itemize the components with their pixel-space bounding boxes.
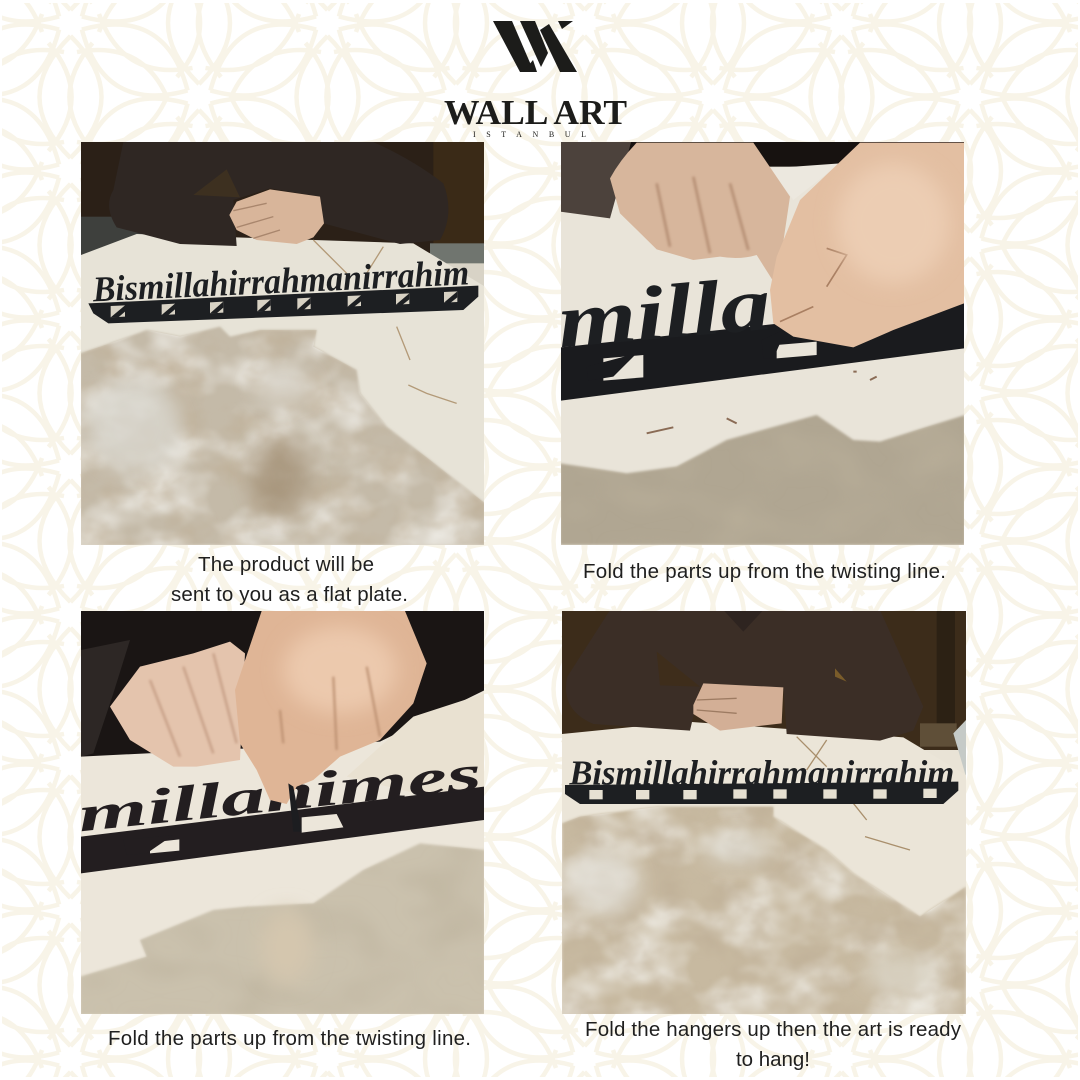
logo xyxy=(444,21,627,139)
right hand xyxy=(235,611,427,804)
plaque lettering: millahimes xyxy=(75,744,484,842)
caption: step 2: Fold the parts up from the twisting line. xyxy=(583,560,946,583)
panel: step 4 photo xyxy=(562,611,966,1014)
left hand xyxy=(610,143,790,287)
logo subtitle: ISTANBUL xyxy=(473,130,586,139)
caption: step 4 xyxy=(585,1018,962,1071)
caption: step 1: sent to you as a flat plate. xyxy=(171,583,408,606)
sweater xyxy=(566,610,923,741)
hands xyxy=(229,189,324,244)
plaque lettering: Bismillahirrahmanirrahim xyxy=(568,754,954,792)
icon: WM monogram xyxy=(493,21,577,72)
tool xyxy=(288,783,302,832)
panel: step 2 photo xyxy=(554,142,964,545)
sweater xyxy=(109,142,448,246)
panel: step 3 photo xyxy=(75,611,484,1014)
plaque lettering: milla xyxy=(554,260,774,364)
metal plaque finished xyxy=(565,754,958,804)
marble lower area xyxy=(560,415,965,545)
hanger tabs xyxy=(111,291,457,317)
caption: step 1: The product will be xyxy=(198,553,374,576)
table top xyxy=(81,234,485,545)
left hand xyxy=(110,642,245,767)
caption: step 4: to hang! xyxy=(736,1048,810,1071)
caption: step 1 xyxy=(171,553,408,606)
panel: step 1 photo xyxy=(81,142,484,545)
marble lower area xyxy=(562,807,966,1015)
plaque lettering: Bismillahirrahmanirrahim xyxy=(91,252,470,309)
metal plaque folding xyxy=(75,744,484,873)
metal plaque folding xyxy=(554,260,964,401)
logo wordmark: WALL ART xyxy=(444,93,627,132)
marble lower area xyxy=(80,843,485,1015)
metal plaque flat xyxy=(88,252,478,323)
right hand xyxy=(770,143,964,347)
table top xyxy=(562,722,966,1015)
caption: step 3: Fold the parts up from the twisting line. xyxy=(108,1027,471,1050)
marble lower area xyxy=(80,327,485,545)
hands xyxy=(693,683,783,731)
caption: step 4: Fold the hangers up then the art is ready xyxy=(585,1018,962,1041)
